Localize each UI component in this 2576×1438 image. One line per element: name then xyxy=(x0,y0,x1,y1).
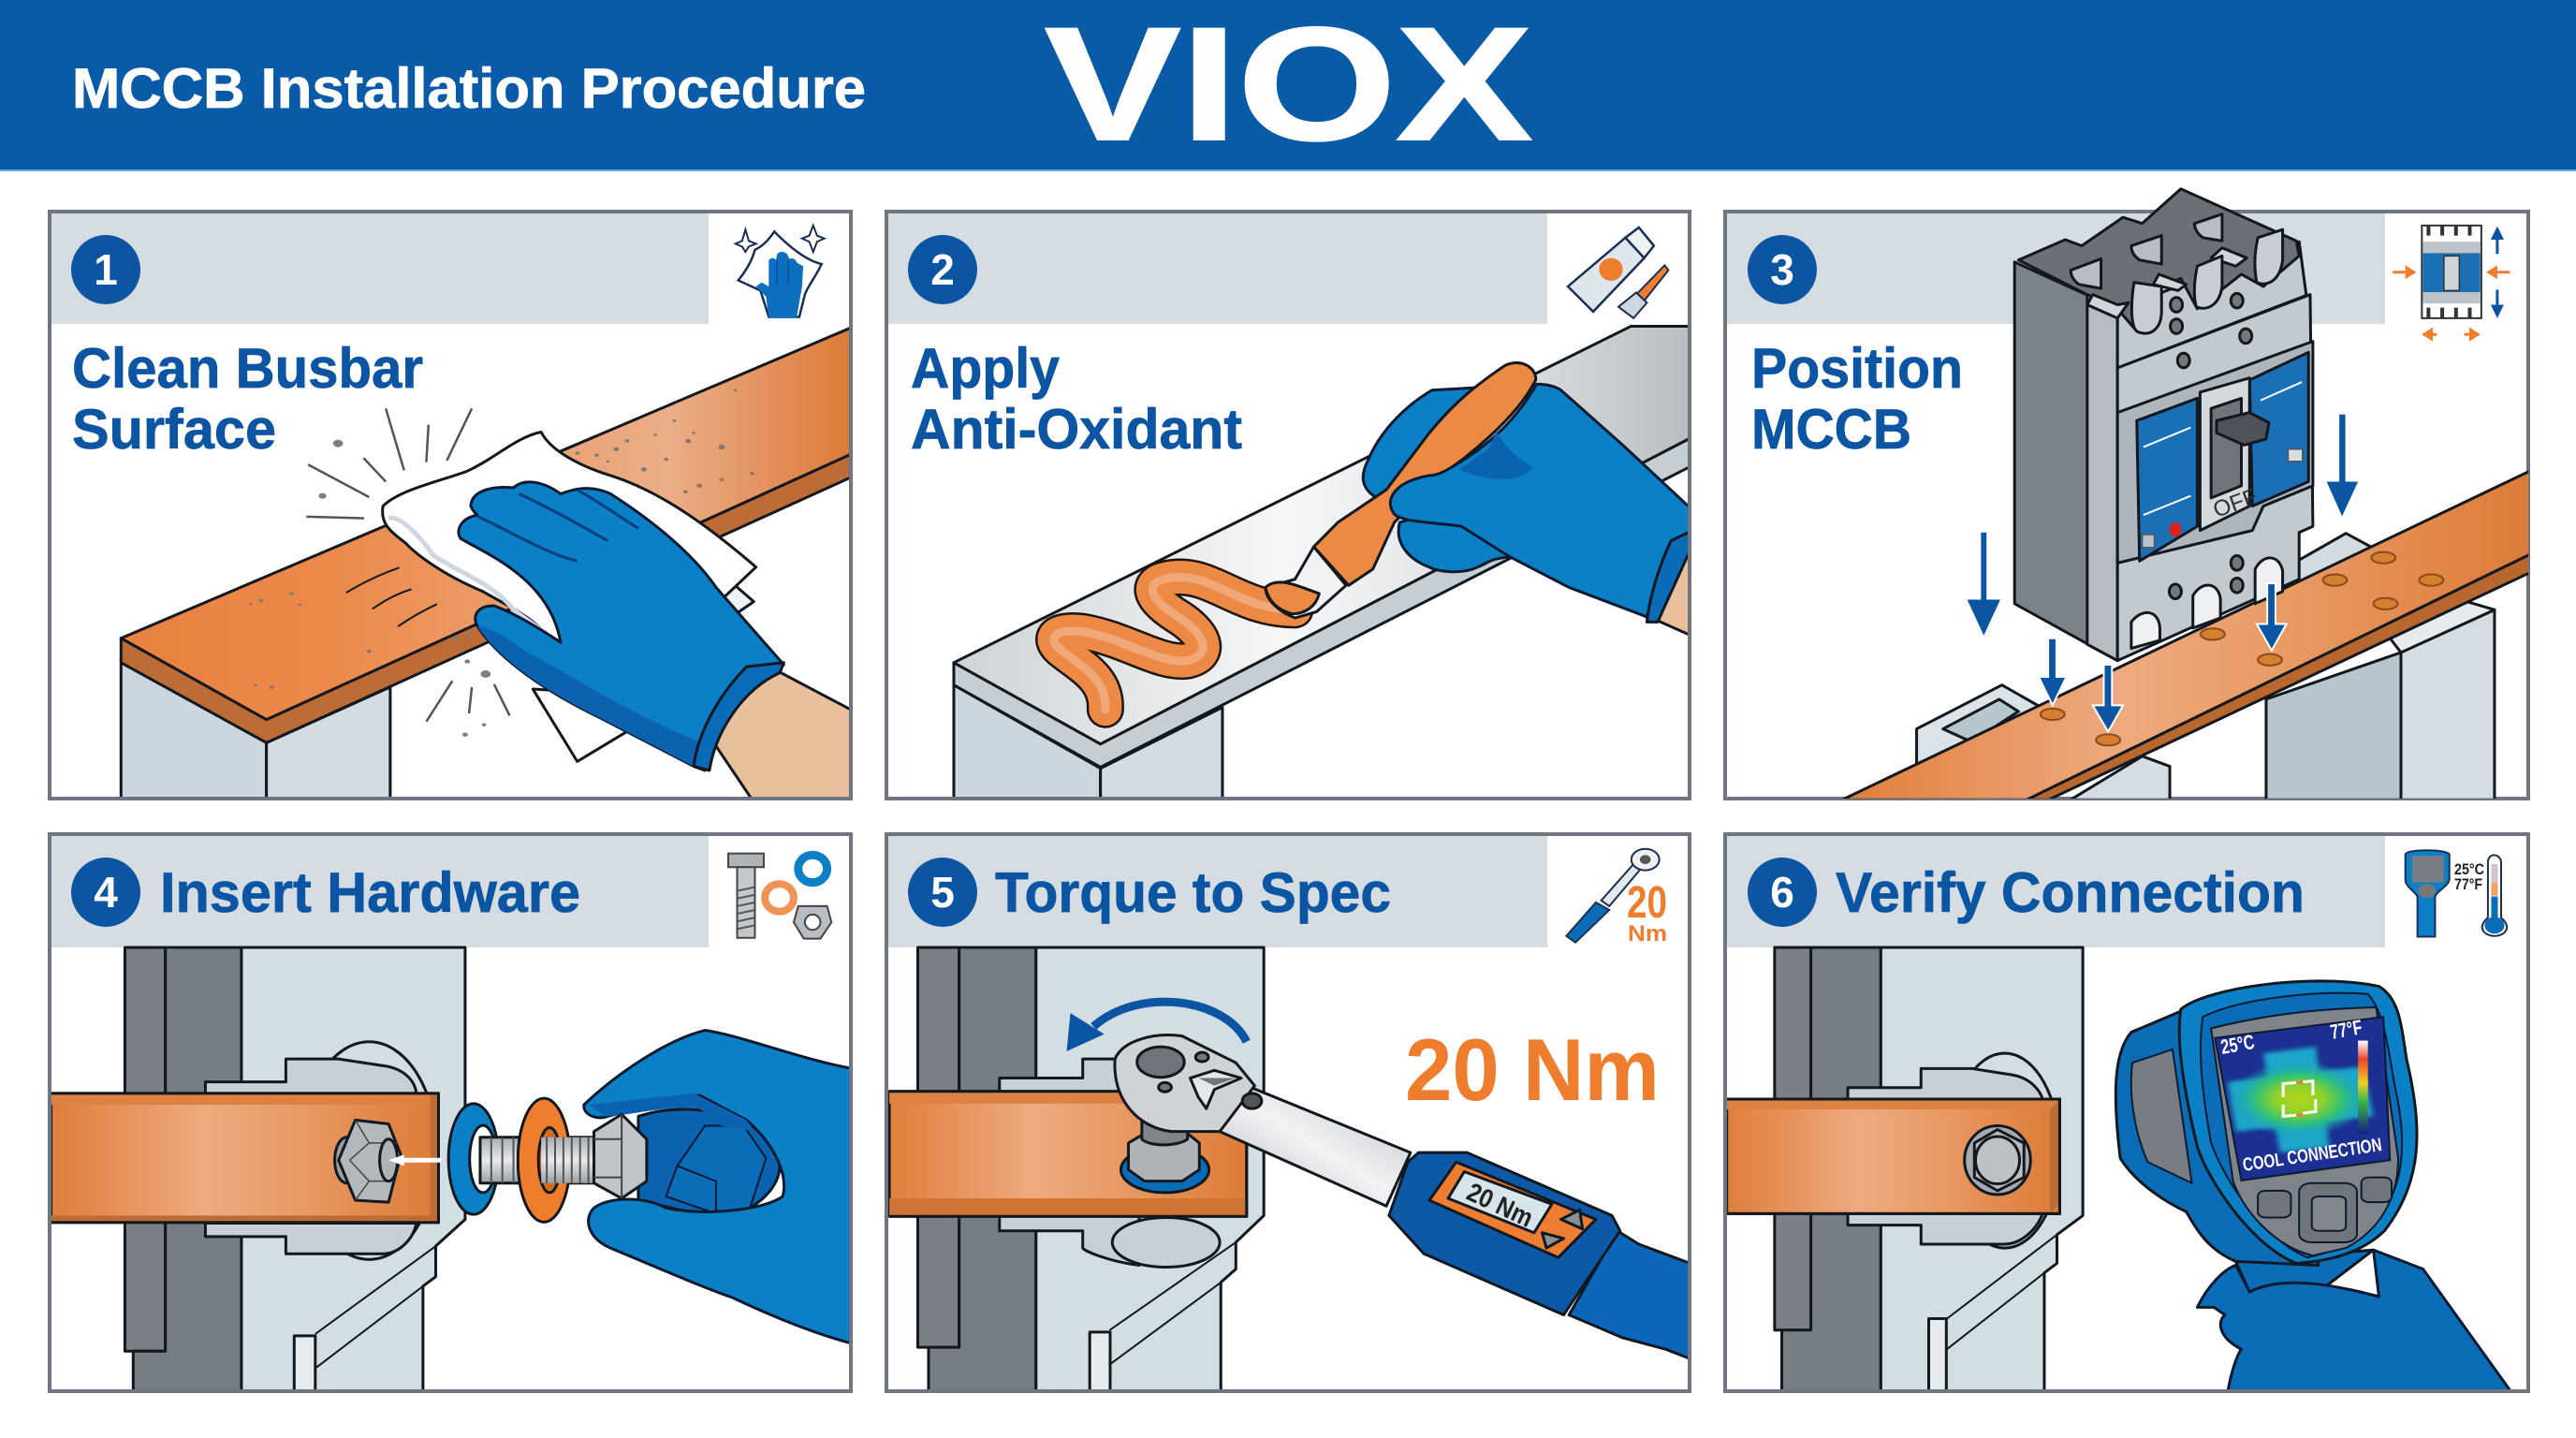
wrench display reading: 20 Nm xyxy=(1462,1177,1538,1233)
step number 3 xyxy=(1748,235,1817,304)
step number 3: 3 xyxy=(1770,245,1794,294)
icon label: 20 Nm: 20 xyxy=(1627,878,1667,928)
screen caption: COOL CONNECTION xyxy=(2241,1135,2383,1176)
panel 3: position MCCB xyxy=(1725,189,2533,800)
heading: Insert Hardware: Insert Hardware xyxy=(160,861,580,924)
heading: Apply Anti-Oxidant: Anti-Oxidant xyxy=(911,398,1242,461)
icon: bolt, washers, nut xyxy=(728,854,831,939)
panel 6: verify connection xyxy=(1725,834,2528,1393)
heading: Apply Anti-Oxidant xyxy=(911,337,1242,461)
gloved hand xyxy=(2197,1250,2512,1393)
icon text: temperatures: 77°F xyxy=(2454,875,2482,893)
OFF label: OFF xyxy=(2210,484,2261,523)
illustration: hand wiping copper busbar xyxy=(121,226,850,800)
illustration: brush applying compound xyxy=(954,227,1692,800)
icon: thermometer and imager xyxy=(2406,850,2507,937)
heading: Clean Busbar Surface: Surface xyxy=(72,398,276,461)
heading: Clean Busbar Surface: Clean Busbar xyxy=(72,337,423,400)
icon label: 20 Nm xyxy=(1627,878,1667,946)
thermal camera xyxy=(2115,981,2417,1393)
step number 6 xyxy=(1748,858,1817,927)
header bar xyxy=(0,0,2576,174)
screen reading: temperature left: 25°C xyxy=(2219,1030,2256,1059)
step number 2 xyxy=(908,235,977,304)
bolt head xyxy=(594,1114,647,1198)
illustration: breaker lowered on drilled busbar xyxy=(1842,189,2533,800)
icon text: temperatures: 25°C xyxy=(2454,860,2484,878)
icon: wipe and glove xyxy=(736,226,825,318)
icon: alignment xyxy=(2393,226,2510,342)
step number 5 xyxy=(908,858,977,927)
step number 5: 5 xyxy=(930,868,955,917)
heading: Torque to Spec: Torque to Spec xyxy=(995,861,1391,924)
step number 1: 1 xyxy=(94,245,118,294)
step number 6: 6 xyxy=(1770,868,1794,917)
panel 5: torque to spec xyxy=(886,834,1695,1393)
icon text: temperatures xyxy=(2454,860,2484,893)
illustration: bolt and washers xyxy=(51,854,852,1393)
wrench handle xyxy=(1389,1152,1695,1360)
heading: Apply Anti-Oxidant: Apply xyxy=(911,337,1061,400)
panel 4: insert hardware xyxy=(50,834,852,1393)
heading: Position MCCB xyxy=(1751,337,1963,461)
torque value callout: 20 Nm xyxy=(1405,1020,1660,1119)
illustration: thermal camera check xyxy=(1727,850,2512,1393)
step number 1 xyxy=(71,235,140,304)
gloved hand xyxy=(584,1031,852,1343)
step number 4 xyxy=(71,858,140,927)
rotation arrow xyxy=(1067,1002,1247,1051)
icon: compound tube and brush xyxy=(1568,227,1668,318)
heading: Verify Connection: Verify Connection xyxy=(1836,861,2305,924)
icon: wrench xyxy=(1566,849,1660,943)
screen reading: temperature right: 77°F xyxy=(2329,1015,2364,1044)
icon label: 20 Nm: Nm xyxy=(1628,921,1667,946)
MCCB breaker xyxy=(2014,189,2313,661)
panel 1: clean busbar surface xyxy=(50,212,851,800)
heading: Position MCCB: MCCB xyxy=(1751,398,1911,461)
step number 2: 2 xyxy=(930,245,955,294)
heading: Clean Busbar Surface xyxy=(72,337,423,461)
alignment arrows xyxy=(1968,415,2358,732)
heading: Position MCCB: Position xyxy=(1751,337,1963,400)
rear right support xyxy=(1917,534,2495,800)
title: MCCB Installation Procedure xyxy=(72,57,866,120)
panel 2: apply anti-oxidant xyxy=(886,212,1692,800)
illustration: torque wrench xyxy=(889,849,1695,1393)
step number 4: 4 xyxy=(94,868,118,917)
